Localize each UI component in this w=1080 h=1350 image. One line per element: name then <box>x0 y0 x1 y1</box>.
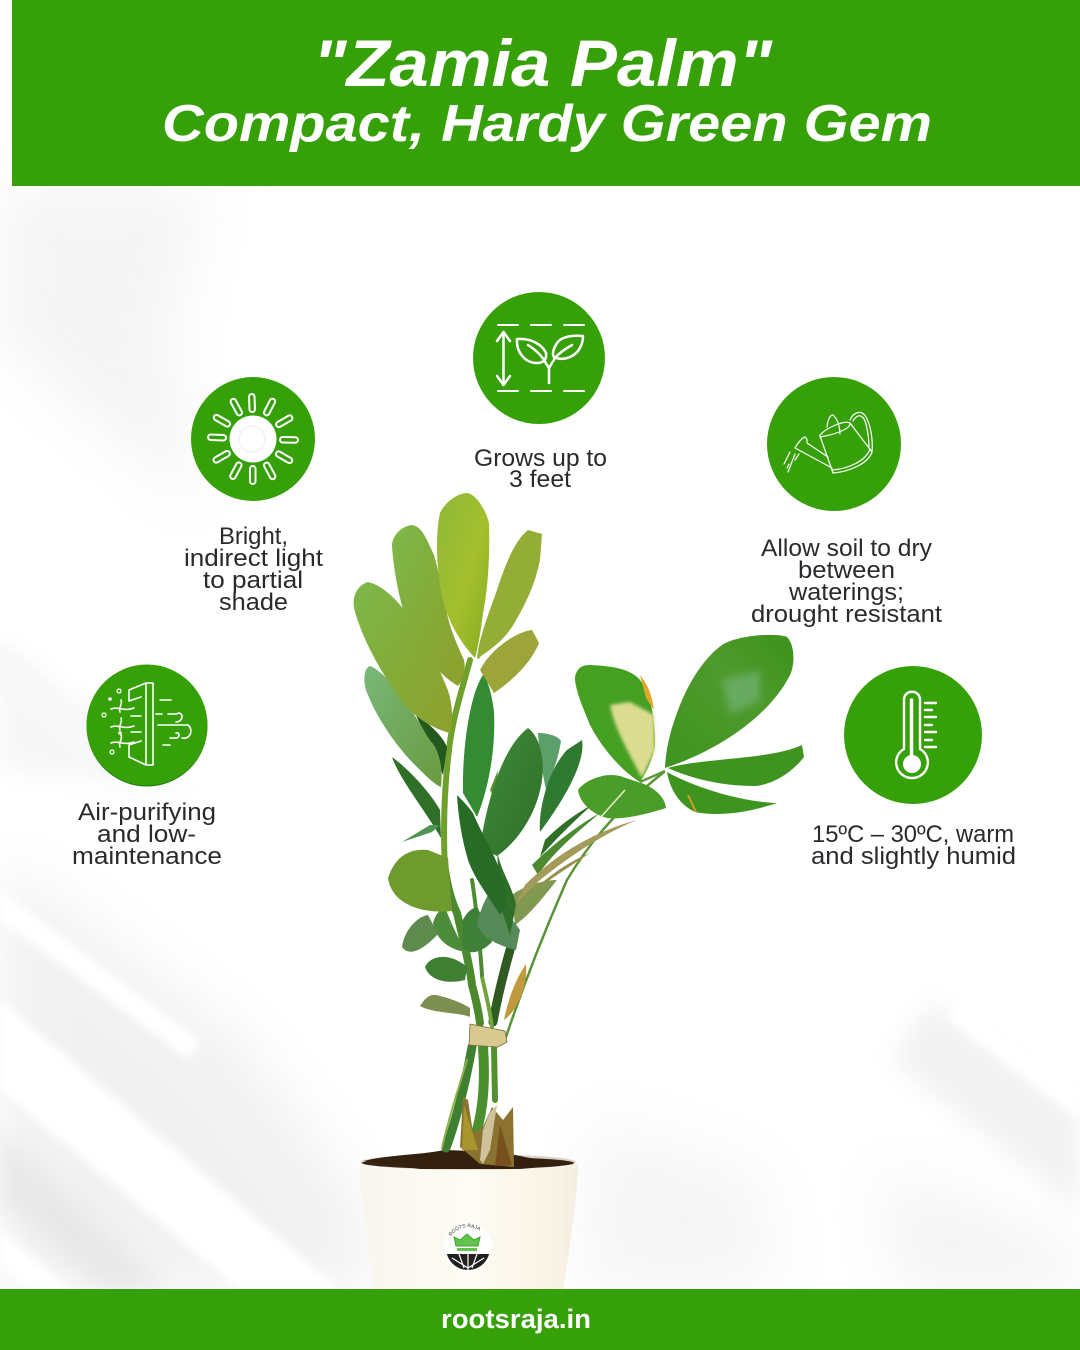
label: grows up to 3 feet: 3 feet <box>509 466 571 493</box>
icon: plant height <box>473 292 605 424</box>
icon: thermometer <box>844 666 982 804</box>
feature: air purifying <box>72 664 222 870</box>
label: temperature: 15ºC – 30ºC, warm <box>812 821 1014 848</box>
dried leaf <box>504 964 526 1020</box>
title: "Zamia Palm" <box>313 26 773 100</box>
label: watering: between <box>798 557 895 584</box>
subtitle: Compact, Hardy Green Gem <box>162 95 932 153</box>
pot <box>359 1163 578 1289</box>
raffia tie <box>469 1024 507 1047</box>
pot soil <box>360 1150 576 1170</box>
label: watering: Allow soil to dry <box>761 535 932 562</box>
label: air purifying: and low- <box>97 821 196 848</box>
label: air purifying <box>72 799 222 870</box>
label: light: Bright, <box>219 523 288 550</box>
dark mid leaves <box>392 675 637 935</box>
icon: watering can <box>767 377 901 511</box>
icon: air filter <box>86 664 208 786</box>
right leaf cluster <box>575 635 804 818</box>
feature: light <box>184 377 323 616</box>
label: watering: waterings; <box>788 579 904 606</box>
icon: sun <box>191 377 315 501</box>
header band <box>12 0 1080 186</box>
footer band <box>0 1289 1080 1350</box>
pot logo sticker: ROOTS RAJA <box>448 1224 480 1236</box>
label: light: to partial <box>203 567 303 594</box>
label: watering <box>751 535 942 628</box>
label: grows up to 3 feet <box>474 445 607 493</box>
label: light: indirect light <box>184 545 323 572</box>
label: air purifying: Air-purifying <box>78 799 216 826</box>
lower round leaves <box>388 850 557 1017</box>
label: watering: drought resistant <box>751 601 942 628</box>
feature: height <box>473 292 607 493</box>
label: light: shade <box>219 589 288 616</box>
upper lime leaves <box>354 493 542 787</box>
woody base <box>460 1097 514 1167</box>
website url: rootsraja.in <box>441 1304 591 1334</box>
label: air purifying: maintenance <box>72 843 222 870</box>
label: grows up to 3 feet: Grows up to <box>474 445 607 472</box>
stems <box>442 660 664 1148</box>
pot logo sticker <box>444 1224 492 1272</box>
label: temperature: and slightly humid <box>811 843 1016 870</box>
feature: temperature <box>811 666 1016 870</box>
plant illustration <box>354 493 820 1289</box>
label: temperature <box>811 821 1016 870</box>
label: light <box>184 523 323 616</box>
feature: watering <box>751 377 942 628</box>
